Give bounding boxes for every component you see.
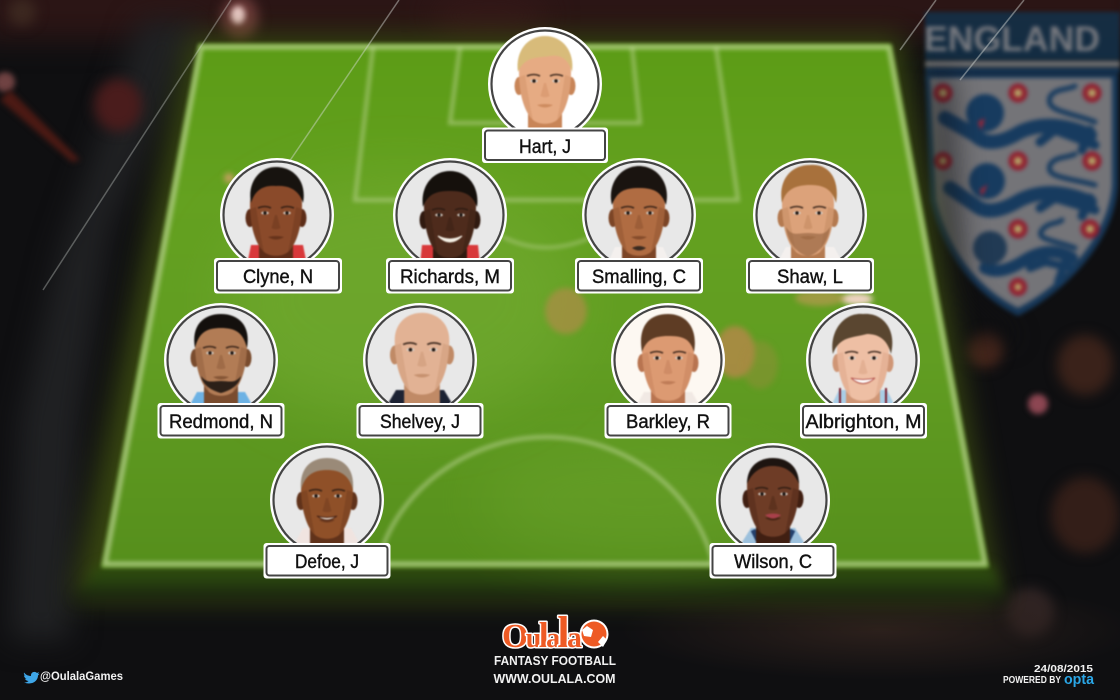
portrait: Clyne bbox=[220, 158, 334, 258]
portrait: Redmond bbox=[164, 303, 278, 403]
England crest bbox=[924, 12, 1120, 316]
name label: Barkley, R: Barkley, R bbox=[626, 412, 710, 433]
name label: Hart, J: Hart, J bbox=[519, 137, 571, 158]
name label: Albrighton, M: Albrighton, M bbox=[806, 412, 922, 433]
icon: twitter bird bbox=[24, 672, 40, 683]
footer: fantasy football text: FANTASY FOOTBALL bbox=[494, 654, 616, 668]
portrait: Shelvey bbox=[363, 303, 477, 403]
portrait: Shaw bbox=[753, 158, 867, 258]
pitch shadow bbox=[72, 36, 1000, 600]
player: Shelvey, J bbox=[356, 303, 484, 438]
footer: website: WWW.OULALA.COM bbox=[494, 672, 616, 686]
powered by: POWERED BY bbox=[1003, 675, 1061, 686]
twitter handle: @OulalaGames bbox=[40, 669, 123, 683]
name label: Smalling, C: Smalling, C bbox=[592, 267, 686, 288]
name label: Richards, M: Richards, M bbox=[400, 267, 500, 288]
England crest: ENGLAND bbox=[924, 20, 1100, 59]
opta logo: opta bbox=[1064, 671, 1095, 688]
portrait: Albrighton bbox=[806, 303, 920, 403]
portrait: Hart bbox=[488, 27, 602, 128]
player: Smalling, C bbox=[575, 158, 703, 294]
portrait: Wilson bbox=[716, 443, 830, 543]
player: Albrighton, M bbox=[800, 303, 927, 438]
pitch bokeh highlights bbox=[224, 173, 873, 389]
name label: Shelvey, J: Shelvey, J bbox=[380, 412, 460, 433]
light streaks bbox=[43, 0, 1024, 290]
player: Wilson, C bbox=[710, 443, 836, 578]
player: Clyne, N bbox=[214, 158, 342, 294]
portrait: Defoe bbox=[270, 443, 384, 543]
name label: Redmond, N: Redmond, N bbox=[169, 412, 273, 433]
portrait: Richards bbox=[393, 158, 507, 258]
player: Hart, J bbox=[482, 27, 608, 163]
player: Barkley, R bbox=[604, 303, 732, 438]
portrait: Barkley bbox=[611, 303, 725, 403]
name label: Clyne, N: Clyne, N bbox=[243, 267, 313, 288]
player: Defoe, J bbox=[264, 443, 390, 578]
name label: Wilson, C: Wilson, C bbox=[734, 552, 812, 573]
player: Shaw, L bbox=[746, 158, 874, 294]
portrait: Smalling bbox=[582, 158, 696, 258]
pitch bbox=[74, 44, 1006, 600]
name label: Shaw, L: Shaw, L bbox=[777, 267, 843, 288]
crest vignette bbox=[930, 70, 1020, 340]
player: Richards, M bbox=[386, 158, 514, 294]
icon: football bbox=[580, 620, 608, 648]
date: 24/08/2015 bbox=[1034, 663, 1093, 675]
logo: Oulala: Oulala bbox=[502, 608, 582, 657]
name label: Defoe, J: Defoe, J bbox=[295, 552, 359, 573]
player: Redmond, N bbox=[158, 303, 284, 438]
